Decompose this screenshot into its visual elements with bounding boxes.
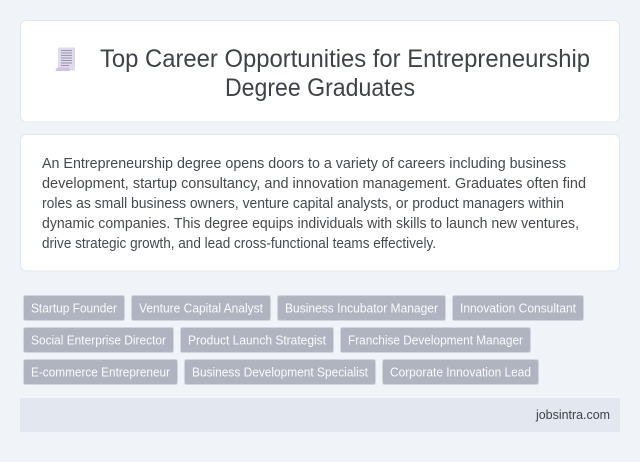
footer bar [20, 398, 620, 432]
tag: Business Incubator Manager: Business Incubator Manager [285, 300, 439, 316]
tag: Franchise Development Manager [340, 328, 530, 352]
career tags [24, 296, 584, 384]
description text: development, startup consultancy, and innovation management. Graduates often find [42, 176, 586, 192]
tag: Business Development Specialist: Business Development Specialist [192, 364, 368, 380]
footer source text: jobsintra.com [535, 408, 610, 422]
description text: roles as small business owners, venture capital analysts, or product managers within [42, 196, 564, 212]
tag: E-commerce Entrepreneur [24, 360, 178, 384]
title: Top Career Opportunities for Entrepreneurship [100, 45, 590, 73]
tag: Business Development Specialist [184, 360, 376, 384]
tag: Product Launch Strategist [180, 328, 334, 352]
description text: drive strategic growth, and lead cross-functional teams effectively. [42, 236, 436, 252]
tag: Venture Capital Analyst [132, 296, 270, 320]
panel: description card [20, 134, 620, 271]
tag: Business Incubator Manager [278, 296, 446, 320]
tag: E-commerce Entrepreneur: E-commerce Entrepreneur [31, 364, 171, 380]
tag: Franchise Development Manager: Franchise Development Manager [348, 332, 524, 348]
tag: Product Launch Strategist: Product Launch Strategist [188, 332, 326, 348]
tag: Startup Founder: Startup Founder [31, 300, 118, 316]
tag: Innovation Consultant [452, 296, 584, 320]
panel: header card [20, 20, 620, 122]
title: Degree Graduates [225, 74, 415, 102]
tag: Innovation Consultant: Innovation Consultant [460, 300, 576, 316]
tag: Corporate Innovation Lead [382, 360, 538, 384]
title [100, 45, 590, 102]
description text: An Entrepreneurship degree opens doors to a variety of careers including business [42, 156, 566, 172]
tag: Corporate Innovation Lead: Corporate Innovation Lead [390, 364, 531, 380]
description text [42, 156, 586, 252]
description text: dynamic companies. This degree equips individuals with skills to launch new ventures, [42, 216, 579, 232]
tag: Startup Founder [24, 296, 124, 320]
tag: Social Enterprise Director: Social Enterprise Director [31, 332, 167, 348]
tag: Venture Capital Analyst: Venture Capital Analyst [139, 300, 263, 316]
icon: paper scroll [56, 48, 75, 71]
tag: Social Enterprise Director [24, 328, 174, 352]
